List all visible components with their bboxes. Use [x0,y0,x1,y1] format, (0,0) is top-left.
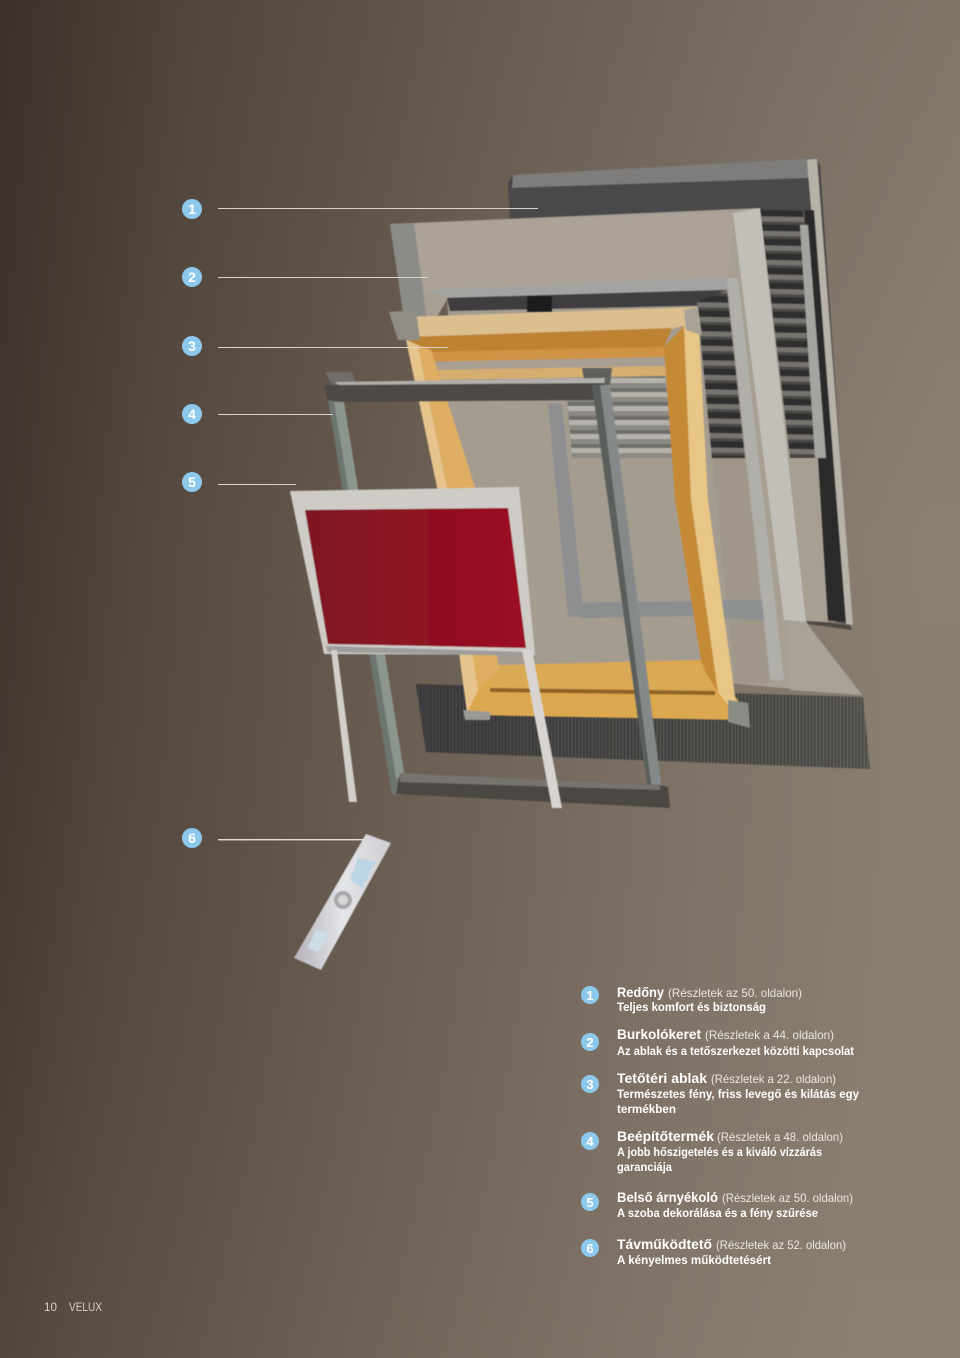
legend item 5: A szoba dekorálása és a fény szűrése [617,1206,818,1220]
legend item 3: (Részletek a 22. oldalon) [711,1072,836,1086]
legend item 4: A jobb hőszigetelés és a kiváló vízzárás [617,1145,822,1159]
legend item 1: Teljes komfort és biztonság [617,1000,766,1014]
number badges on diagram: 1 [188,201,196,217]
product: roller shutter [508,158,853,630]
legend item 3: Tetőtéri ablak [617,1070,707,1086]
legend item 5: (Részletek az 50. oldalon) [722,1191,853,1205]
legend item 6: 6 [586,1241,594,1256]
product: bottom mesh [416,684,870,769]
number badges on diagram: 6 [188,830,196,846]
legend item 4 [581,1128,843,1174]
legend item 3: 3 [586,1077,594,1092]
legend item 3 [581,1070,859,1116]
product: opening with shutter slats [447,290,764,620]
legend item 4: (Részletek a 48. oldalon) [717,1130,843,1144]
product: installation frame [324,368,670,808]
number badges on diagram: 2 [188,269,196,285]
legend item 4: Beépítőtermék [617,1128,714,1144]
number badges on diagram [182,199,202,848]
legend item 1: (Részletek az 50. oldalon) [668,986,802,1000]
number badges on diagram: 3 [188,338,196,354]
legend item 6: Távműködtető [617,1236,712,1252]
legend item 5: 5 [586,1195,594,1210]
number badges on diagram: 5 [188,474,196,490]
legend item 4: garanciája [617,1160,672,1174]
legend item 2: Az ablak és a tetőszerkezet közötti kapcsolat [617,1044,854,1058]
legend item 6: A kényelmes működtetésért [617,1253,771,1267]
footer: page number and brand: VELUX [69,1300,102,1314]
legend item 1 [581,984,802,1014]
product: interior blind [290,487,562,808]
legend item 1: Redőny [617,984,664,1000]
legend item 2: Burkolókeret [617,1026,701,1042]
legend item 6: (Részletek az 52. oldalon) [716,1238,846,1252]
product: wooden roof window [389,307,750,728]
legend item 2 [581,1026,854,1058]
legend item 4: 4 [586,1134,594,1149]
icon: remote control [294,834,391,970]
footer: page number and brand: 10 [44,1300,57,1314]
legend item 2: 2 [586,1035,594,1050]
number badges on diagram: 4 [188,406,196,422]
legend item 3: Természetes fény, friss levegő és kilátás egy [617,1087,859,1101]
footer: page number and brand [44,1300,102,1314]
legend item 1: 1 [586,988,594,1003]
product: flashing frame [390,208,862,695]
legend item 5: Belső árnyékoló [617,1189,718,1205]
legend item 5 [581,1189,853,1220]
callout lines [218,208,538,840]
legend item 2: (Részletek a 44. oldalon) [705,1028,834,1042]
legend item 6 [581,1236,846,1267]
legend item 3: termékben [617,1102,676,1116]
